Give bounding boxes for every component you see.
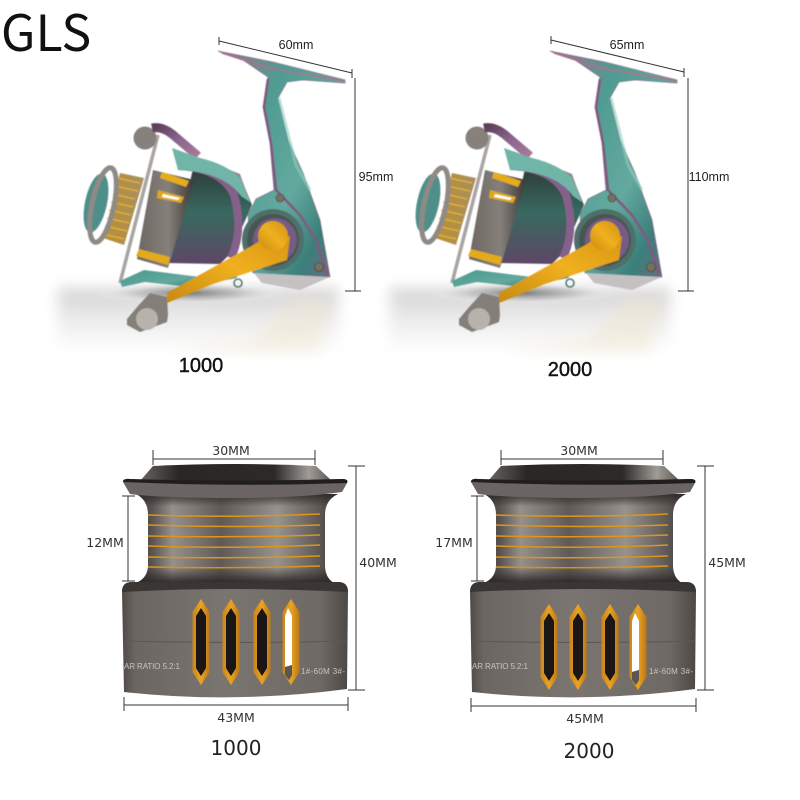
product photo: reel 2000 (390, 51, 677, 352)
width dimension 60mm: 60mm (279, 38, 313, 52)
spool slots (540, 604, 646, 690)
spool top rim (123, 464, 347, 498)
size label 1000: 1000 (179, 355, 223, 377)
spool base (122, 582, 348, 697)
spool slots (192, 599, 300, 685)
spool 1000 dimensions: 40MM (359, 555, 397, 570)
spool 1000 dimensions: 43MM (217, 710, 255, 725)
height dimension 110mm (678, 78, 729, 291)
spool neck with gold line (136, 494, 338, 583)
height dimension 110mm: 110mm (689, 170, 729, 184)
spool 2000 dimensions: 45MM (566, 711, 604, 726)
spool base (470, 582, 696, 697)
size label 2000: 2000 (548, 359, 592, 381)
spool 1000 (122, 464, 348, 697)
spool 2000 (470, 464, 696, 697)
engraved gear ratio text (472, 662, 693, 676)
height dimension 95mm (345, 78, 393, 291)
width dimension 65mm: 65mm (610, 38, 644, 52)
engraved gear ratio text: 1#-60M 3#- (301, 667, 345, 676)
spool 1000 dimensions: 12MM (86, 535, 124, 550)
width dimension 65mm (551, 36, 684, 77)
engraved gear ratio text: AR RATIO 5.2:1 (124, 662, 181, 671)
spool neck with gold line (484, 494, 686, 583)
spool 2000 dimensions: 30MM (560, 443, 598, 458)
height dimension 95mm: 95mm (359, 170, 393, 184)
spool top rim (471, 464, 695, 498)
spool 1000 dimensions (86, 443, 397, 725)
spool 2000 dimensions: 45MM (708, 555, 746, 570)
spool 2000 dimensions (435, 443, 746, 726)
width dimension 60mm (219, 37, 352, 78)
product photo: reel 1000 (58, 51, 345, 352)
spool 2000 dimensions: 17MM (435, 535, 473, 550)
engraved gear ratio text: 1#-60M 3#- (649, 667, 693, 676)
size label 1000: 1000 (211, 736, 261, 760)
engraved gear ratio text: AR RATIO 5.2:1 (472, 662, 529, 671)
size label 2000: 2000 (564, 739, 614, 763)
engraved gear ratio text (124, 662, 345, 676)
spool 1000 dimensions: 30MM (212, 443, 250, 458)
